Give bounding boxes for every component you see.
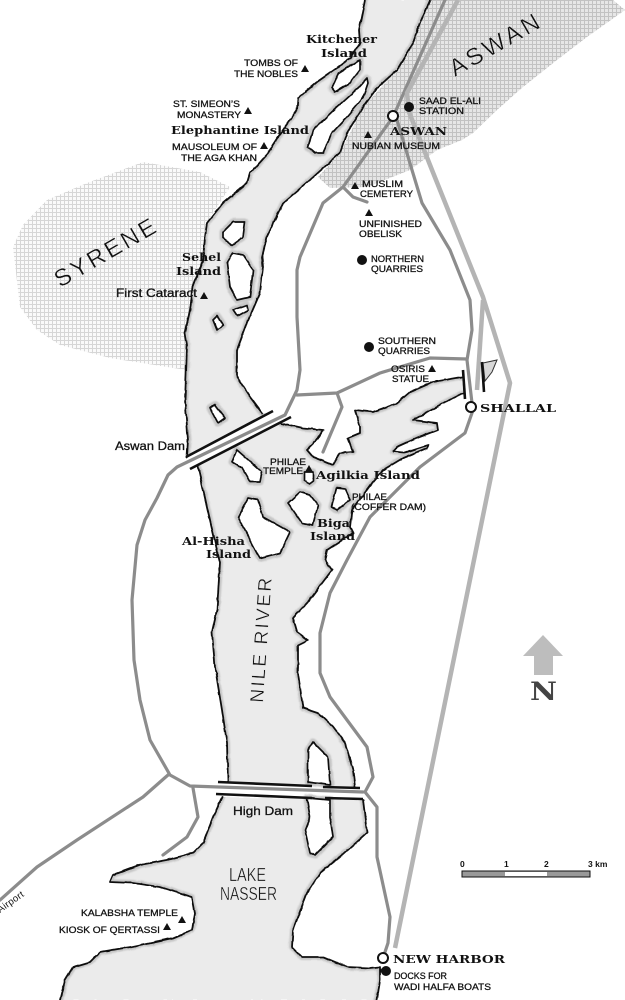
label: Sehel Island xyxy=(176,250,222,278)
label: Docks for Wadi Halfa boats: DOCKS FOR xyxy=(394,971,447,982)
label: Northern Quarries: NORTHERN xyxy=(371,254,424,265)
label: Mausoleum of the Aga Khan: THE AGA KHAN xyxy=(181,153,257,164)
label: Saad El-Ali Station: STATION xyxy=(419,106,464,117)
scale bar: 1 xyxy=(504,859,509,869)
region: Aswan hatched area xyxy=(318,0,625,188)
label: Muslim Cemetery: MUSLIM xyxy=(362,179,403,190)
label: Unfinished Obelisk xyxy=(359,219,422,240)
label: Aswan town: ASWAN xyxy=(389,124,448,138)
site markers: black dots xyxy=(357,102,414,976)
label: Osiris Statue xyxy=(391,364,429,385)
label: Muslim Cemetery: CEMETERY xyxy=(360,189,414,200)
label: Aswan Dam: Aswan Dam xyxy=(115,439,185,453)
label: First Cataract: First Cataract xyxy=(116,286,198,300)
label: Kalabsha Temple: KALABSHA TEMPLE xyxy=(81,908,178,919)
label: Kiosk of Qertassi: KIOSK OF QERTASSI xyxy=(59,925,160,936)
label: St. Simeon's Monastery xyxy=(173,99,242,121)
label: Kitchener Island: Island xyxy=(321,46,367,60)
label: Elephantine Island: Elephantine Island xyxy=(171,123,309,137)
label: Saad El-Ali Station xyxy=(419,96,481,117)
label: Aswan region: ASWAN xyxy=(444,9,545,82)
label: Lake Nasser: NASSER xyxy=(220,884,277,904)
icon: north arrow xyxy=(523,635,563,675)
label: Saad El-Ali Station: SAAD EL-ALI xyxy=(419,96,481,107)
label: St. Simeon's Monastery: MONASTERY xyxy=(177,110,242,121)
label: Nubian Museum: NUBIAN MUSEUM xyxy=(352,141,440,152)
label: Philae Temple: PHILAE xyxy=(270,457,306,468)
label: Tombs of the Nobles: TOMBS OF xyxy=(244,58,298,69)
label: Southern Quarries: QUARRIES xyxy=(378,346,430,357)
label: Northern Quarries xyxy=(371,254,424,275)
label: Sehel Island: Island xyxy=(176,264,221,278)
label: Syrene: SYRENE xyxy=(50,213,161,293)
scale bar: 2 xyxy=(544,859,549,869)
label: Southern Quarries: SOUTHERN xyxy=(378,336,436,347)
light gray main road xyxy=(395,0,510,948)
site markers: triangles xyxy=(163,65,436,930)
label: Nile River: NILE RIVER xyxy=(247,577,277,703)
scale bar: 0 xyxy=(460,859,465,869)
roads xyxy=(0,0,472,955)
label: Al-Hisha Island: Island xyxy=(206,547,251,561)
label: Docks for Wadi Halfa boats xyxy=(394,971,491,993)
scale bar xyxy=(460,859,608,877)
label: Philae Temple: TEMPLE xyxy=(263,466,303,477)
label: Philae coffer dam: (COFFER DAM) xyxy=(351,502,426,513)
label: Philae coffer dam xyxy=(351,492,426,513)
label: St. Simeon's Monastery: ST. SIMEON’S xyxy=(173,99,240,110)
scale bar: 3 km xyxy=(588,859,608,869)
town markers: open circles xyxy=(378,111,476,963)
region: Syrene hatched area xyxy=(13,162,230,370)
label: Agilkia Island: Agilkia Island xyxy=(315,468,420,482)
label: Docks for Wadi Halfa boats: WADI HALFA BOATS xyxy=(394,982,491,993)
label: Southern Quarries xyxy=(378,336,436,357)
label: Mausoleum of the Aga Khan: MAUSOLEUM OF xyxy=(172,142,257,153)
label: Osiris Statue: STATUE xyxy=(392,374,429,385)
label: Biga Island xyxy=(310,516,355,543)
label: Kitchener Island xyxy=(306,32,378,60)
label: New Harbor: NEW HARBOR xyxy=(393,952,506,966)
label: Northern Quarries: QUARRIES xyxy=(371,264,423,275)
label: Muslim Cemetery xyxy=(360,179,414,200)
label: Al-Hisha Island: Al-Hisha xyxy=(181,534,246,548)
label: Lake Nasser: LAKE xyxy=(229,865,266,885)
dams xyxy=(186,362,484,799)
river: Nile and Lake Nasser water xyxy=(59,0,464,1000)
north letter: N xyxy=(530,677,557,706)
label: Biga Island: Island xyxy=(310,529,355,543)
label: Tombs of the Nobles: THE NOBLES xyxy=(234,69,298,80)
label: High Dam: High Dam xyxy=(233,804,293,818)
label: Sehel Island: Sehel xyxy=(182,250,222,264)
label: Mausoleum of the Aga Khan xyxy=(172,142,257,164)
label: Osiris Statue: OSIRIS xyxy=(391,364,425,375)
label: Biga Island: Biga xyxy=(317,516,351,530)
label: Philae coffer dam: PHILAE xyxy=(352,492,387,503)
label: Tombs of the Nobles xyxy=(234,58,298,80)
reservoir east of Shallal dam xyxy=(483,360,497,381)
label: Unfinished Obelisk: OBELISK xyxy=(359,229,403,240)
label: Philae Temple xyxy=(263,457,306,477)
label: Kitchener Island: Kitchener xyxy=(306,32,378,46)
label: Unfinished Obelisk: UNFINISHED xyxy=(359,219,422,230)
label: Lake Nasser xyxy=(220,865,277,904)
label: Shallal: SHALLAL xyxy=(480,401,556,415)
label: Al-Hisha Island xyxy=(181,534,251,561)
